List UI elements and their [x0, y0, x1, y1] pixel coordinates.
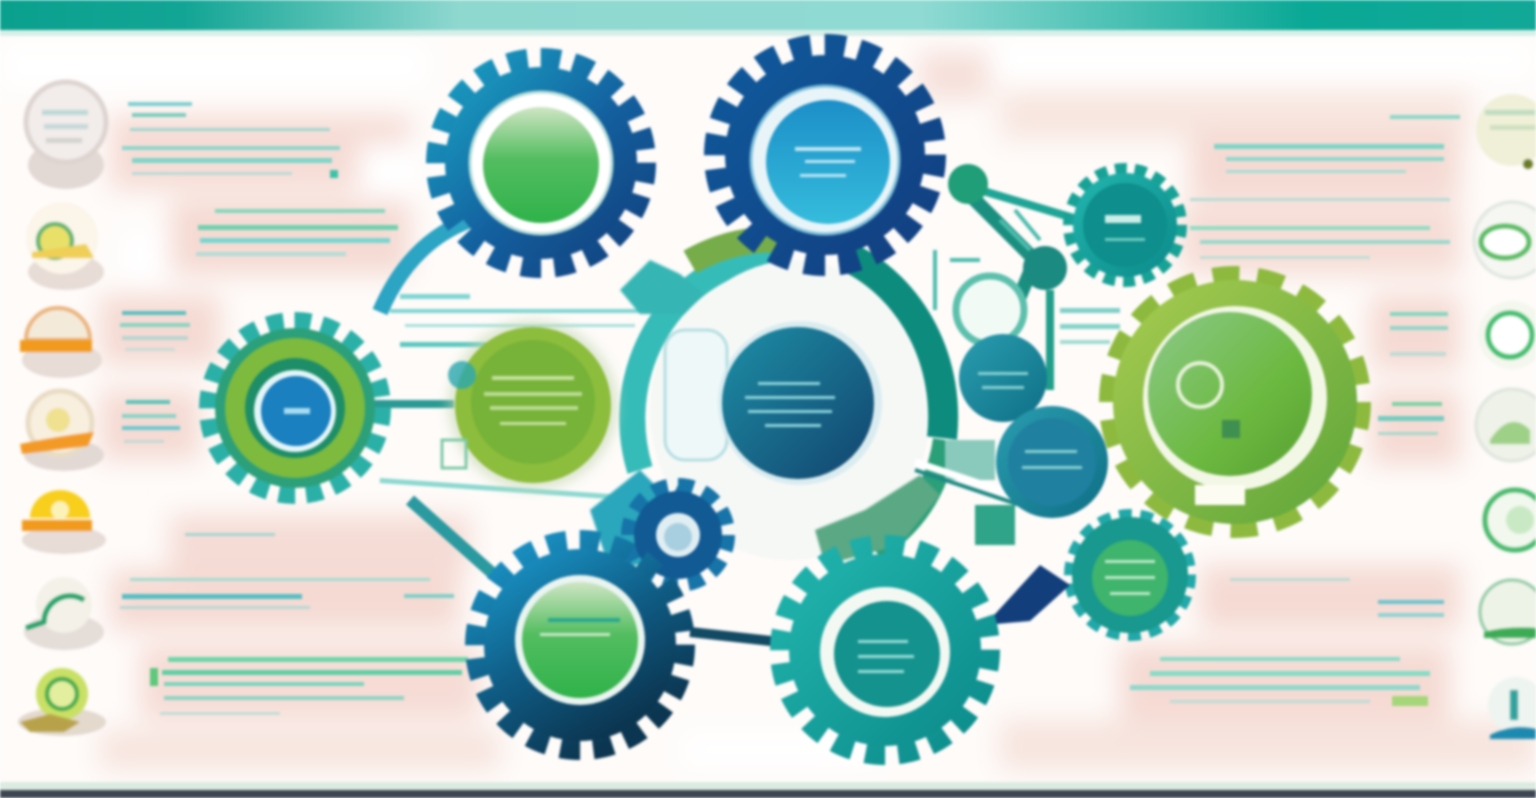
icon: yellow hard hat — [22, 490, 106, 554]
gear: large olive — [1110, 277, 1360, 527]
icon: green ring — [1478, 301, 1536, 369]
gear: bottom right teal — [780, 545, 990, 755]
icon: green coin — [18, 668, 106, 736]
icon: pale dome top right — [1476, 94, 1536, 169]
top header bar — [0, 0, 1536, 36]
gear face: teal — [834, 601, 940, 707]
connectors: mid text lines — [374, 294, 1120, 501]
gear face: fading green — [522, 582, 638, 698]
gear: left green — [208, 321, 382, 495]
arrow: lower left connector — [410, 500, 500, 580]
gear face: olive — [1148, 312, 1312, 476]
gear: lower teal circle — [996, 406, 1108, 518]
gear: top left blue — [436, 58, 646, 268]
icon: orange lens — [20, 391, 104, 471]
gear face: green — [483, 107, 599, 223]
arrow: blue arc from top gear to left gear — [380, 220, 470, 312]
text bars: third left — [120, 311, 190, 351]
left icon column — [18, 82, 106, 736]
text bars: bottom left — [150, 657, 468, 715]
arrow: navy wedge — [985, 565, 1070, 625]
icon: yellow badge — [26, 202, 104, 290]
gear: green blob — [442, 321, 617, 489]
gear face: blue — [766, 100, 890, 224]
icon: teal ring — [1485, 490, 1536, 550]
gear: small blue — [628, 485, 728, 585]
text bars: upper left — [122, 102, 340, 178]
text bars: fourth left — [122, 400, 180, 443]
gear face: blue — [261, 376, 331, 446]
icon: green arrow — [24, 577, 104, 650]
gear: lower right teal-green — [1070, 515, 1190, 635]
icon: grey dome — [26, 82, 106, 189]
arrow: connector bars between lower gears — [690, 632, 780, 642]
right connector network — [915, 164, 1080, 545]
text bars: lower right — [1130, 578, 1444, 706]
gear: top right teal — [1069, 169, 1181, 281]
text bars: lower left — [120, 533, 454, 609]
gear: mid teal circle — [959, 334, 1047, 422]
right icon column — [1474, 94, 1536, 739]
icon: orange dome — [20, 308, 102, 378]
gear: top centre navy — [715, 45, 935, 265]
text bars: second left — [196, 209, 398, 256]
text bars: upper right — [1190, 115, 1460, 259]
bottom footer bar — [0, 782, 1536, 798]
icon: blue wave — [1488, 677, 1536, 739]
icon: green pill — [1474, 202, 1536, 278]
gear: bottom left dark blue — [475, 540, 685, 750]
central ring — [632, 239, 945, 560]
icon: pale green badge — [1476, 389, 1536, 461]
gear: central dark circle — [718, 321, 882, 485]
icon: green leaf — [1480, 580, 1536, 644]
scattered teal splash — [590, 260, 940, 570]
text bars: right middle — [1378, 312, 1448, 435]
